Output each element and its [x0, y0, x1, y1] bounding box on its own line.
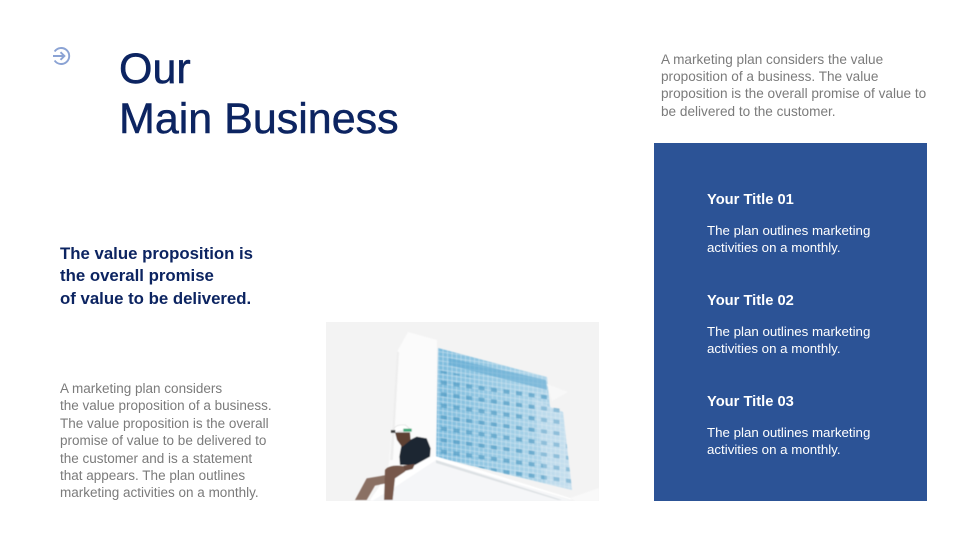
- item 01: [707, 192, 870, 254]
- item 03: activities on a monthly.: [707, 442, 841, 456]
- top right paragraph: proposition of a business. The value: [661, 69, 878, 84]
- item 01: activities on a monthly.: [707, 240, 841, 254]
- title: Our: [119, 45, 191, 93]
- item 02: activities on a monthly.: [707, 340, 841, 356]
- body paragraph: the value proposition of a business.: [60, 398, 272, 413]
- item 02: The plan outlines marketing: [707, 324, 870, 338]
- top right paragraph: be delivered to the customer.: [661, 104, 836, 119]
- subheading: the overall promise: [60, 266, 214, 285]
- title: Main Business: [119, 94, 399, 142]
- body paragraph: The value proposition is the overall: [60, 416, 269, 431]
- item 03: Your Title 03: [707, 394, 794, 410]
- panel: titles: [654, 143, 927, 501]
- white tower: [388, 332, 437, 474]
- body paragraph: the customer and is a statement: [60, 451, 252, 466]
- man: [355, 425, 431, 500]
- title: [119, 45, 399, 142]
- photo: man sitting on ledge before glass building: [326, 322, 599, 501]
- top right paragraph: [661, 52, 926, 119]
- roof ledge: [370, 457, 572, 501]
- body paragraph: [60, 381, 272, 500]
- item 03: The plan outlines marketing: [707, 424, 870, 440]
- item 02: Your Title 02: [707, 293, 794, 309]
- body paragraph: that appears. The plan outlines: [60, 468, 245, 483]
- top right paragraph: proposition is the overall promise of value to: [661, 86, 926, 101]
- top right paragraph: A marketing plan considers the value: [661, 52, 883, 66]
- subheading: of value to be delivered.: [60, 288, 251, 308]
- item 01: Your Title 01: [707, 192, 794, 208]
- body paragraph: promise of value to be delivered to: [60, 433, 266, 448]
- item 02: [707, 293, 870, 356]
- item 01: The plan outlines marketing: [707, 222, 870, 238]
- glass facade: [436, 348, 572, 490]
- icon: circled arrow: [53, 47, 70, 65]
- item 03: [707, 394, 870, 456]
- subheading: The value proposition is: [60, 244, 253, 262]
- body paragraph: marketing activities on a monthly.: [60, 485, 259, 500]
- subheading: [60, 244, 253, 308]
- body paragraph: A marketing plan considers: [60, 381, 222, 396]
